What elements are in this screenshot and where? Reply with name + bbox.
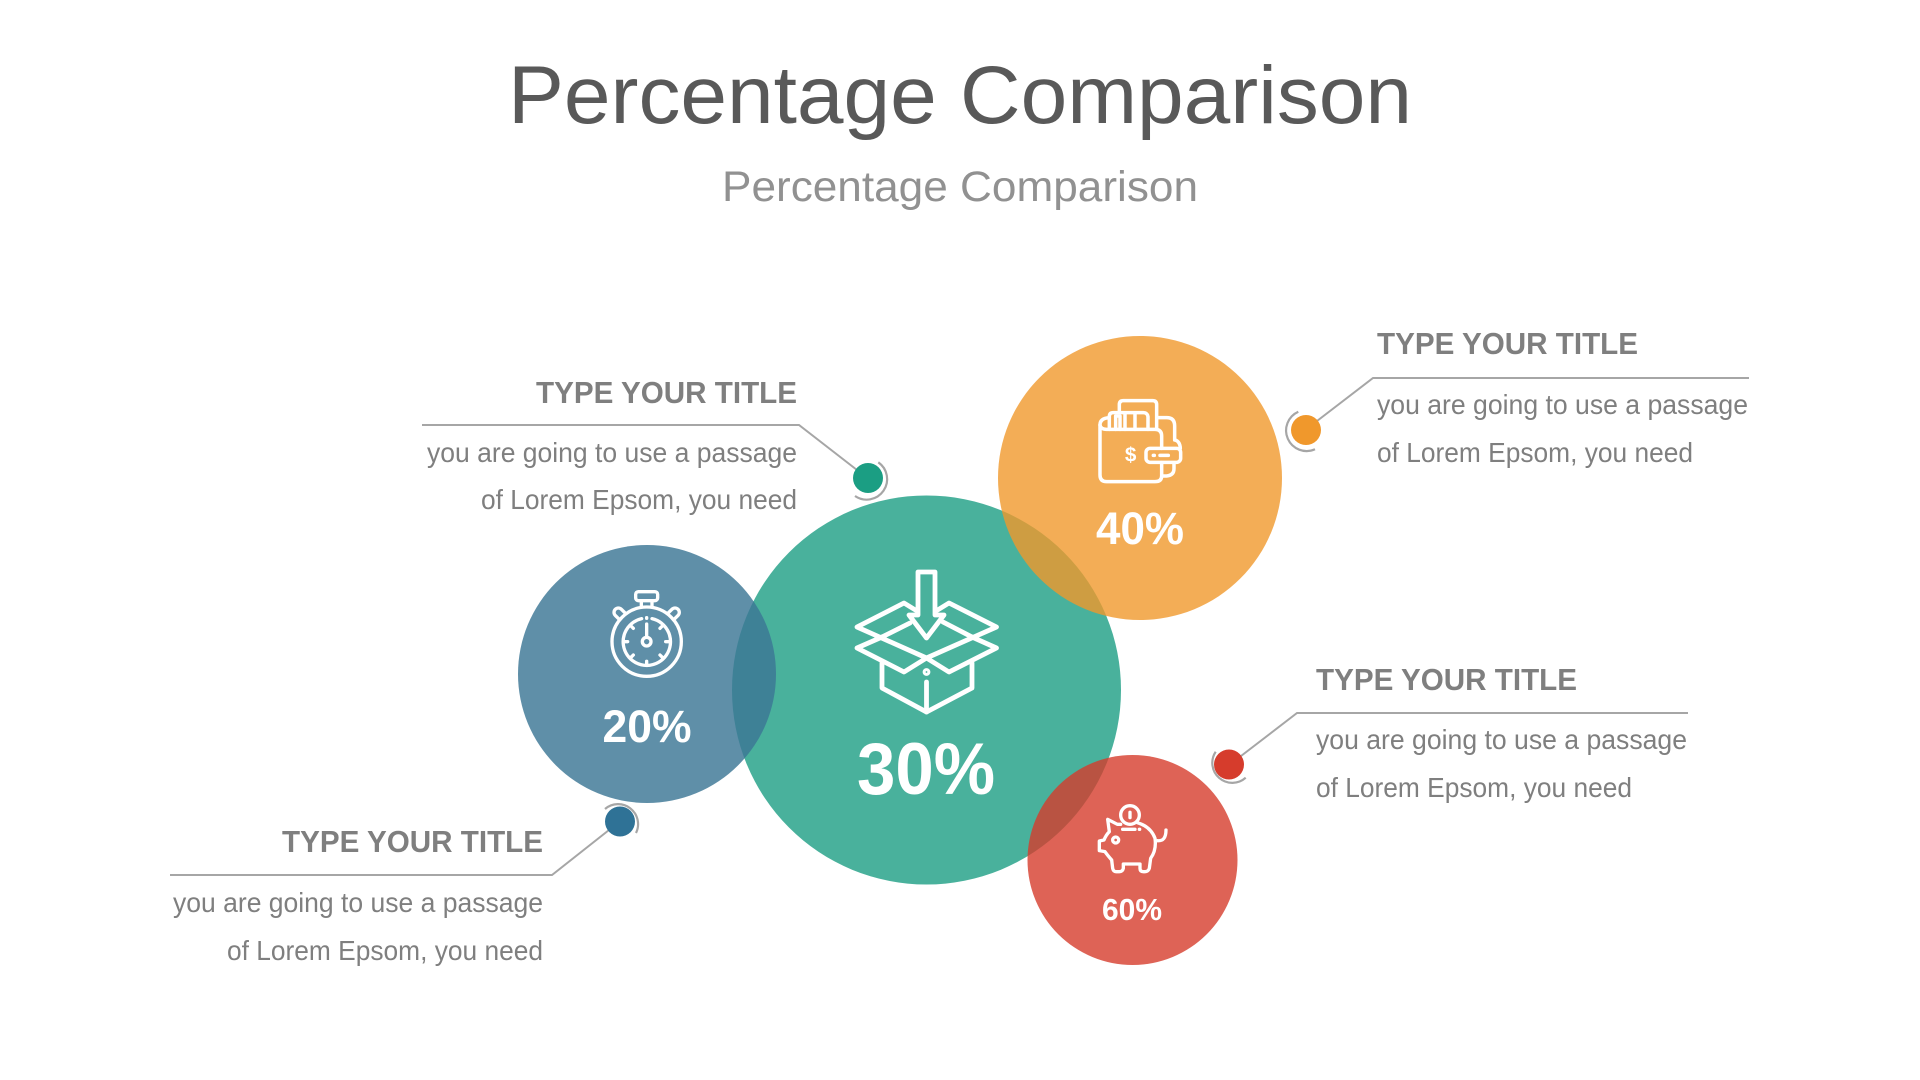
percentage: 40%: 40% xyxy=(1096,503,1184,554)
icon: stopwatch xyxy=(612,592,681,676)
callout: top right, orange xyxy=(1286,326,1749,468)
icon: box with down arrow xyxy=(857,572,996,712)
callout title: TYPE YOUR TITLE xyxy=(282,824,543,859)
callout title: TYPE YOUR TITLE xyxy=(1316,662,1577,697)
callout title: TYPE YOUR TITLE xyxy=(536,375,797,410)
subtitle: Percentage Comparison xyxy=(722,163,1198,211)
callout body: you are going to use a passage xyxy=(427,437,797,468)
callout title: TYPE YOUR TITLE xyxy=(1377,326,1638,361)
leader line xyxy=(170,830,609,875)
icon: piggy bank xyxy=(1099,806,1166,872)
icon: wallet: $ xyxy=(1125,443,1137,466)
circle: orange 40% xyxy=(998,336,1282,620)
callout body: you are going to use a passage xyxy=(1377,389,1748,420)
leader line xyxy=(1317,378,1749,421)
title: Percentage Comparison xyxy=(508,50,1412,141)
callout body: of Lorem Epsom, you need xyxy=(227,935,543,966)
callout body: you are going to use a passage xyxy=(173,887,543,918)
icon: wallet xyxy=(1100,401,1181,482)
callout body: of Lorem Epsom, you need xyxy=(1377,437,1693,468)
callout: top left, green xyxy=(422,375,887,515)
marker xyxy=(605,804,638,836)
leader line xyxy=(422,425,857,470)
percentage: 60%: 60% xyxy=(1102,892,1162,927)
circle: blue 20% xyxy=(518,545,776,803)
leader line xyxy=(1241,713,1688,756)
marker xyxy=(853,462,887,500)
callout body: of Lorem Epsom, you need xyxy=(1316,772,1632,803)
callout: bottom left, blue xyxy=(170,804,638,966)
circle: red 60% xyxy=(1028,755,1238,965)
circle: green 30% xyxy=(732,496,1121,884)
callout: bottom right, red xyxy=(1212,662,1688,803)
percentage: 20%: 20% xyxy=(602,701,692,752)
marker xyxy=(1286,412,1321,451)
percentage: 30%: 30% xyxy=(857,729,995,810)
callout body: you are going to use a passage xyxy=(1316,724,1687,755)
callout body: of Lorem Epsom, you need xyxy=(481,484,797,515)
marker xyxy=(1212,750,1246,783)
